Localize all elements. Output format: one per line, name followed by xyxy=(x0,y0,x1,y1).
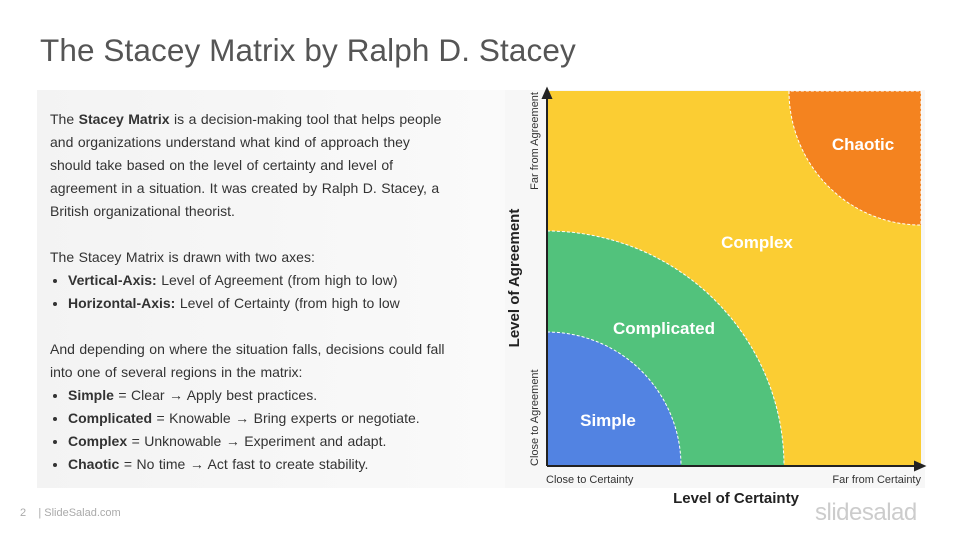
region: complicated: Complicated xyxy=(613,319,715,338)
text block: And depending on where the situation falls, decisions could fall xyxy=(50,341,445,357)
text block: agreement in a situation. It was created by Ralph D. Stacey, a xyxy=(50,180,439,196)
axis labels: Far from Agreement xyxy=(529,92,541,190)
text block: and organizations understand what kind of approach they xyxy=(50,134,410,150)
region: simple xyxy=(547,332,681,466)
text block: Vertical-Axis: Level of Agreement (from high to low) xyxy=(68,272,397,288)
text block: Simple = Clear → Apply best practices. xyxy=(68,387,317,403)
axes xyxy=(543,89,924,470)
text block: Horizontal-Axis: Level of Certainty (from high to low xyxy=(68,295,400,311)
text block: Complicated = Knowable → Bring experts or negotiate. xyxy=(68,410,420,426)
axis labels: Level of Agreement xyxy=(506,209,523,347)
region: complex: Complex xyxy=(721,233,793,252)
region: chaotic: Chaotic xyxy=(832,135,894,154)
text block: Chaotic = No time → Act fast to create stability. xyxy=(68,456,368,472)
logo: slidesalad xyxy=(815,499,917,526)
axis labels: Level of Certainty xyxy=(673,490,800,507)
text block: The Stacey Matrix is drawn with two axes: xyxy=(50,249,315,265)
footer: 2 | SlideSalad.com xyxy=(20,507,121,519)
axis labels: Close to Certainty xyxy=(546,474,634,486)
axis labels xyxy=(506,92,921,507)
region: chaotic xyxy=(789,91,921,225)
text block: British organizational theorist. xyxy=(50,203,235,219)
title: The Stacey Matrix by Ralph D. Stacey xyxy=(40,32,576,68)
text block: The Stacey Matrix is a decision-making tool that helps people xyxy=(50,111,441,127)
panel: description xyxy=(37,90,505,488)
region: complicated xyxy=(547,231,784,466)
text block xyxy=(50,111,445,472)
text block: Complex = Unknowable → Experiment and adapt. xyxy=(68,433,386,449)
axis labels: Close to Agreement xyxy=(529,369,541,466)
region: simple: Simple xyxy=(580,411,636,430)
text block: should take based on the level of certainty and level of xyxy=(50,157,393,173)
text block: into one of several regions in the matrix: xyxy=(50,364,302,380)
region: complex xyxy=(547,91,921,466)
axis labels: Far from Certainty xyxy=(832,474,921,486)
